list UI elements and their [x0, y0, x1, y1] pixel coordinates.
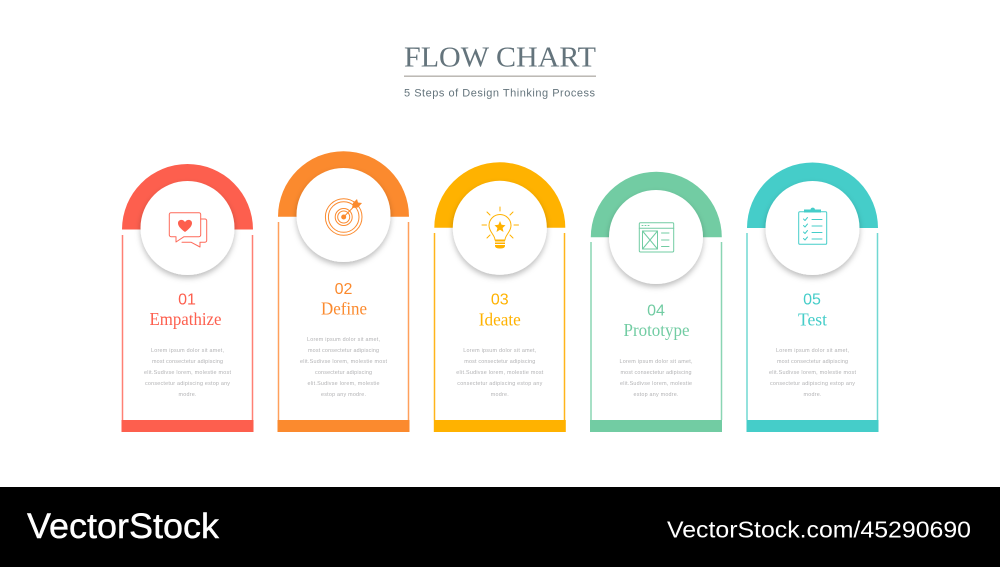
footer url: VectorStock.com/45290690 — [667, 517, 971, 543]
icon: speech bubbles with heart — [169, 213, 207, 247]
body text: modre. — [491, 392, 509, 398]
step heading: Define — [321, 299, 367, 319]
step number: 04 — [647, 303, 665, 320]
body text — [620, 359, 693, 398]
body text: elit.Sudivse lorem, molestie most — [456, 370, 544, 376]
panel: step 01 Empathize — [122, 164, 254, 432]
body text: consectetur adipiscing — [315, 370, 372, 376]
panel: step 03 Ideate — [434, 162, 566, 432]
body text: estop any modre. — [634, 392, 678, 398]
step heading: Prototype — [624, 320, 690, 340]
body text: Lorem ipsum dolor sit amet, — [776, 348, 850, 354]
step number: 05 — [803, 292, 821, 308]
icon: light bulb with star — [482, 207, 518, 248]
body text: Lorem ipsum dolor sit amet, — [620, 359, 693, 365]
step number: 02 — [335, 281, 352, 298]
body text: most consectetur adipiscing — [308, 348, 379, 354]
panel: step 04 Prototype — [590, 172, 722, 432]
body text — [144, 348, 232, 398]
icon: clipboard checklist — [799, 208, 827, 244]
body text: most consectetur adipiscing — [464, 359, 535, 365]
icon: wireframe window — [639, 223, 674, 252]
body text — [769, 348, 856, 398]
step number: 03 — [491, 292, 509, 308]
body text: most consectetur adipiscing — [620, 370, 692, 376]
step heading: Empathize — [150, 309, 222, 329]
step heading: Ideate — [479, 310, 521, 330]
icon: target with arrow — [325, 199, 362, 235]
footer bar — [0, 487, 1000, 567]
body text: consectetur adipiscing estop any — [770, 381, 855, 387]
panel: step 02 Define — [278, 151, 410, 432]
step heading: Test — [798, 310, 827, 330]
body text: modre. — [804, 392, 822, 398]
body text: Lorem ipsum dolor sit amet, — [463, 348, 537, 354]
body text — [456, 348, 544, 398]
footer logo: VectorStock — [27, 507, 220, 546]
body text: elit.Sudivse lorem, molestie most — [144, 370, 232, 376]
title: FLOW CHART — [404, 42, 596, 74]
body text: Lorem ipsum dolor sit amet, — [307, 337, 380, 343]
body text: elit.Sudivse lorem, molestie most — [300, 359, 388, 365]
body text: modre. — [178, 392, 196, 398]
body text: elit.Sudivse lorem, molestie — [308, 381, 380, 387]
panel: step 05 Test — [746, 162, 878, 432]
body text — [300, 337, 388, 398]
body text: consectetur adipiscing estop any — [145, 381, 230, 387]
title block — [404, 42, 596, 100]
body text: elit.Sudivse lorem, molestie most — [769, 370, 856, 376]
body text: most consectetur adipiscing — [152, 359, 223, 365]
body text: Lorem ipsum dolor sit amet, — [151, 348, 224, 354]
body text: elit.Sudivse lorem, molestie — [620, 381, 692, 387]
step number: 01 — [178, 292, 196, 308]
body text: estop any modre. — [321, 392, 366, 398]
body text: consectetur adipiscing estop any — [457, 381, 543, 387]
subtitle: 5 Steps of Design Thinking Process — [404, 88, 596, 100]
body text: most consectetur adipiscing — [777, 359, 848, 365]
